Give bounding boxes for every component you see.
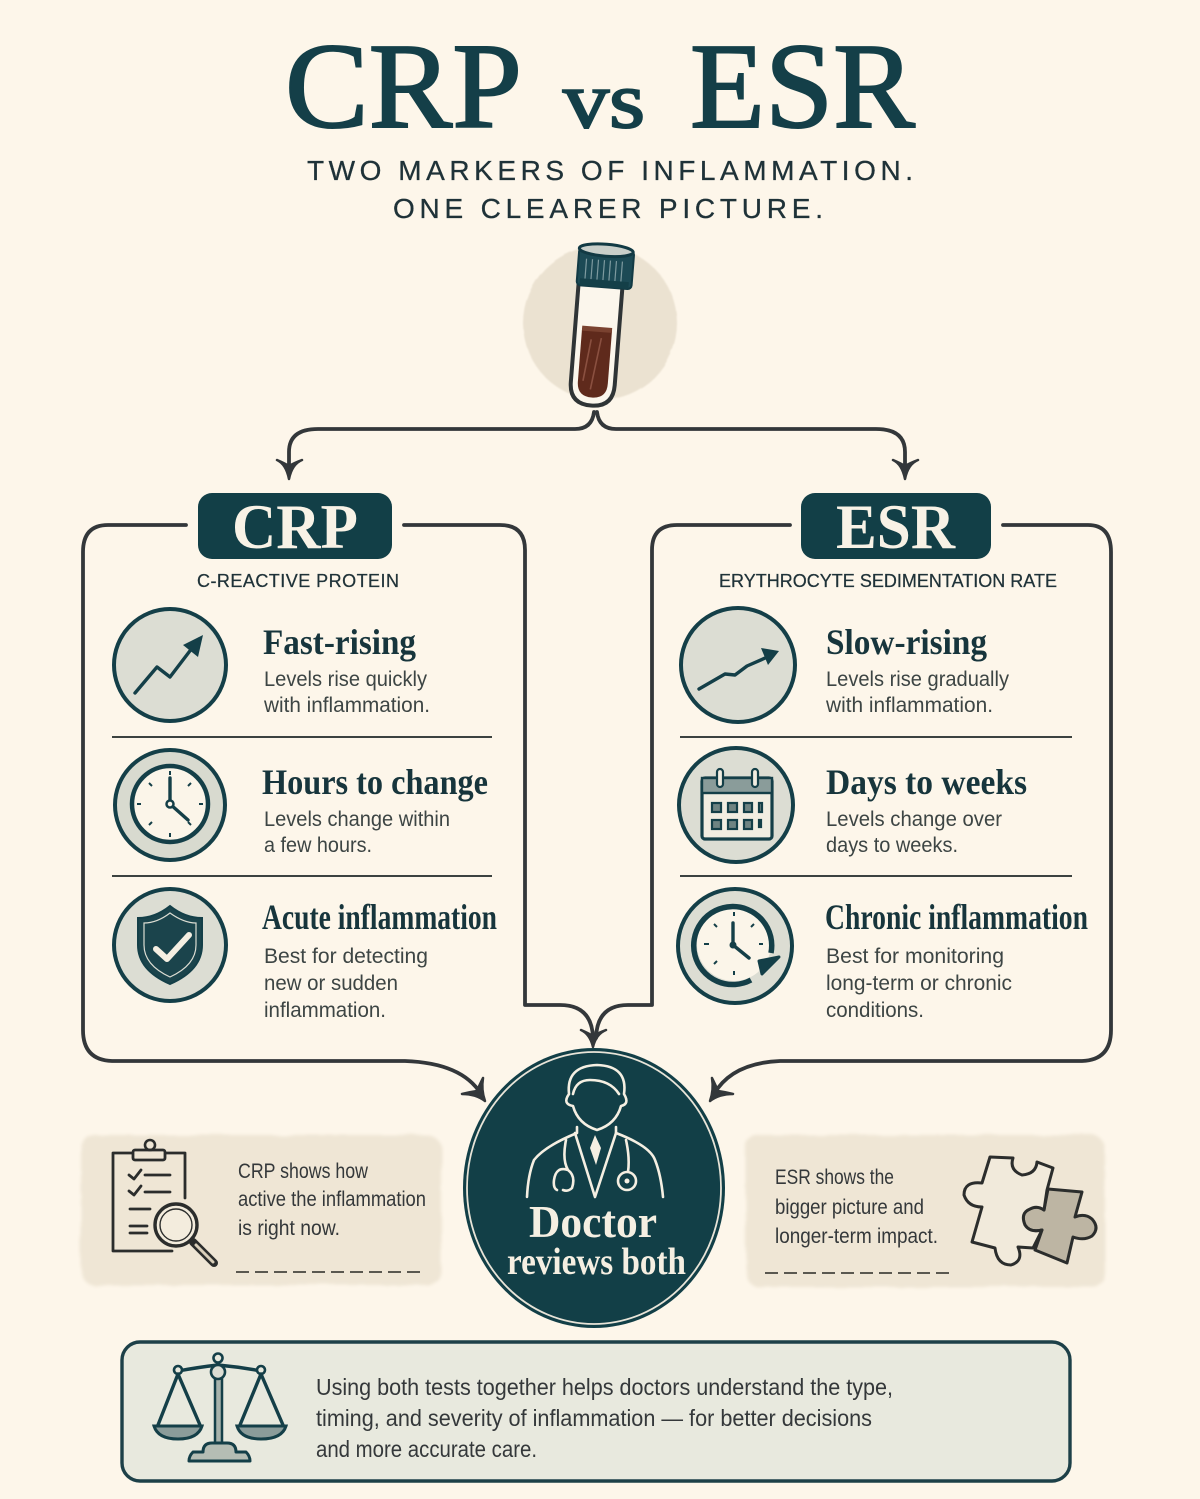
summary text: Using both tests together helps doctors understand the type,: [316, 1374, 893, 1400]
Fast-rising text: Levels rise quickly: [264, 668, 427, 691]
CRP badge: [198, 491, 392, 562]
subtitle: TWO MARKERS OF INFLAMMATION.: [307, 155, 913, 186]
Days to weeks text: Levels change over: [826, 808, 1002, 831]
icon: fast-rising chart: [114, 609, 226, 721]
ESR note text: ESR shows the: [775, 1166, 894, 1189]
icon: clock: [115, 750, 225, 860]
icon: clock with return arrow: [678, 889, 792, 1003]
ESR badge: [801, 491, 991, 562]
Fast-rising text: Fast-rising: [263, 622, 416, 662]
Fast-rising text: [263, 622, 430, 717]
ESR note text: [775, 1166, 938, 1248]
icon: doctor: [527, 1065, 663, 1197]
icon: test tube: [523, 242, 677, 408]
ESR badge: ESR: [836, 491, 956, 562]
title: ESR: [690, 19, 916, 154]
Days to weeks text: [826, 762, 1027, 857]
Days to weeks text: Days to weeks: [826, 762, 1027, 802]
Chronic inflammation text: conditions.: [826, 999, 924, 1022]
Hours to change text: [262, 762, 488, 857]
Chronic inflammation text: Best for monitoring: [826, 945, 1004, 968]
icon: calendar: [679, 748, 793, 862]
Slow-rising text: with inflammation.: [825, 694, 993, 717]
subtitle: [307, 155, 913, 224]
ESR full name: ERYTHROCYTE SEDIMENTATION RATE: [719, 571, 1057, 591]
title: [285, 19, 916, 154]
ESR note text: longer-term impact.: [775, 1225, 938, 1248]
doctor text: [507, 1196, 686, 1283]
summary panel: [122, 1342, 1070, 1481]
arrows: tube to CRP and ESR: [277, 412, 918, 479]
summary text: timing, and severity of inflammation — for better decisions: [316, 1405, 872, 1431]
icon: slow-rising chart: [681, 608, 795, 722]
Acute inflammation text: inflammation.: [264, 999, 386, 1022]
subtitle: ONE CLEARER PICTURE.: [393, 193, 823, 224]
ESR note text: bigger picture and: [775, 1196, 924, 1219]
CRP note text: [238, 1160, 426, 1240]
Hours to change text: a few hours.: [264, 834, 372, 857]
Fast-rising text: with inflammation.: [263, 694, 430, 717]
Acute inflammation text: Acute inflammation: [262, 897, 497, 937]
Slow-rising text: Slow-rising: [826, 622, 987, 662]
callout: ESR note: [746, 1135, 1105, 1287]
Chronic inflammation text: [825, 897, 1088, 1022]
CRP note text: is right now.: [238, 1217, 340, 1240]
ESR panel outline and arrows: [596, 525, 1111, 1101]
Chronic inflammation text: Chronic inflammation: [825, 897, 1088, 937]
callout: CRP note: [81, 1135, 441, 1285]
CRP badge: CRP: [232, 491, 358, 562]
CRP panel outline and arrows: [83, 525, 606, 1101]
panel: CRP: [83, 491, 606, 1101]
icon: puzzle pieces: [964, 1157, 1096, 1265]
doctor text: Doctor: [529, 1196, 657, 1247]
doctor badge: [463, 1048, 725, 1328]
CRP note text: active the inflammation: [238, 1188, 426, 1211]
Slow-rising text: [825, 622, 1009, 717]
title: CRP: [285, 19, 522, 154]
panel: ESR: [596, 491, 1111, 1101]
summary text: [316, 1374, 893, 1462]
Hours to change text: Hours to change: [262, 762, 488, 802]
Chronic inflammation text: long-term or chronic: [826, 972, 1012, 995]
summary text: and more accurate care.: [316, 1436, 537, 1462]
icon: shield: [114, 889, 226, 1001]
Hours to change text: Levels change within: [264, 808, 450, 831]
doctor text: reviews both: [507, 1241, 686, 1283]
icon: balance scale: [154, 1354, 286, 1461]
Acute inflammation text: Best for detecting: [264, 945, 428, 968]
CRP full name: C-REACTIVE PROTEIN: [197, 571, 399, 591]
icon: clipboard and magnifier: [113, 1140, 214, 1263]
Slow-rising text: Levels rise gradually: [826, 668, 1009, 691]
Acute inflammation text: new or sudden: [264, 972, 398, 995]
Days to weeks text: days to weeks.: [826, 834, 958, 857]
CRP note text: CRP shows how: [238, 1160, 369, 1183]
title: vs: [563, 57, 645, 145]
Acute inflammation text: [262, 897, 497, 1022]
